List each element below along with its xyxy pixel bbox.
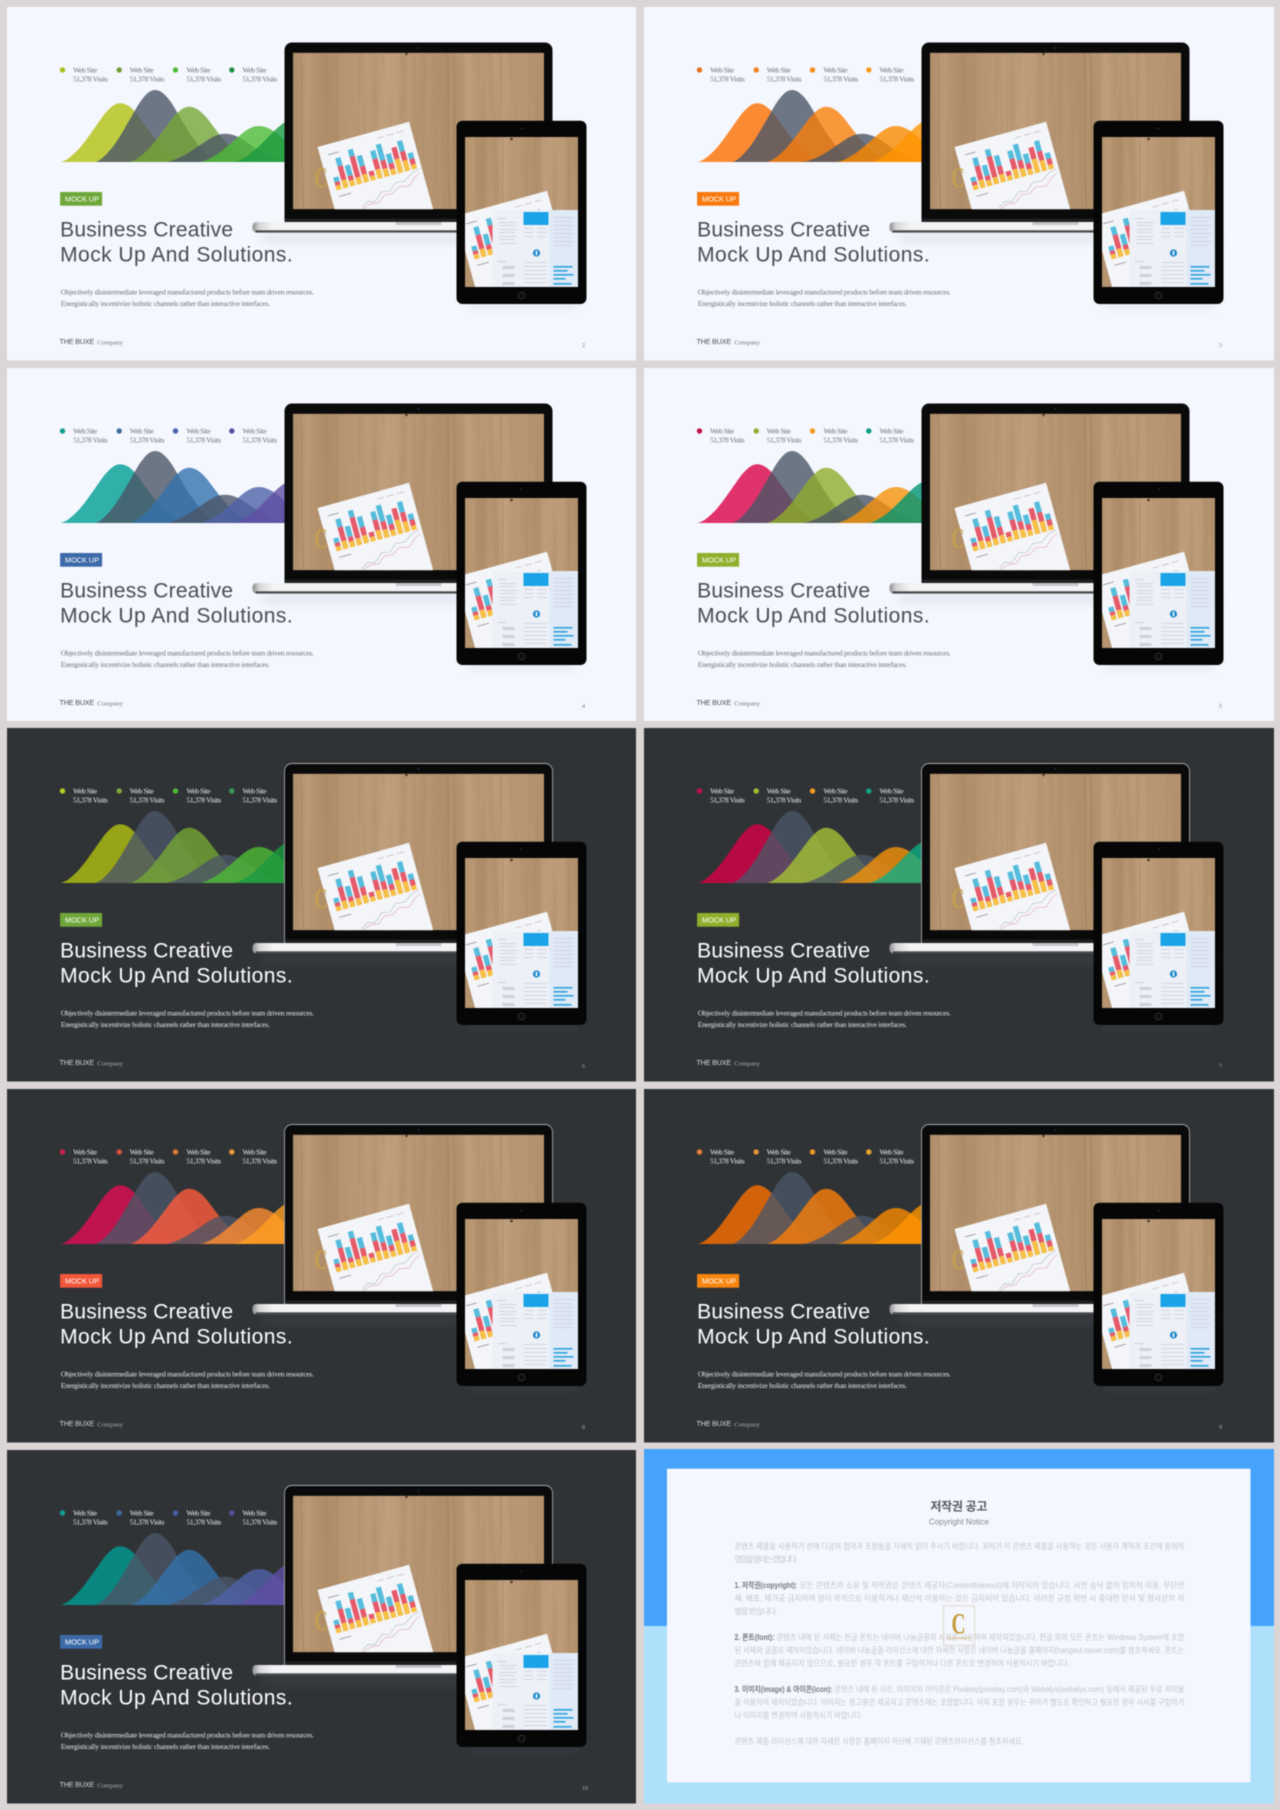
legend item 2: Web Site — [129, 1508, 154, 1517]
title: Mock Up And Solutions. — [697, 965, 929, 988]
legend item 1 — [696, 1147, 744, 1166]
footer brand: THE BUXE — [696, 1058, 731, 1067]
footer brand: Company — [97, 1782, 123, 1790]
body text: Objectively disintermediate leveraged manufactured products before team driven resources. — [60, 1009, 314, 1018]
title: Business Creative — [697, 940, 870, 963]
notice body: 콘텐츠 제품을 사용하기 전에 다음의 협약과 조항들을 자세히 읽어 주시기 바랍니다. 귀하가 이 콘텐츠 제품을 사용하는 것은 사용자 계약과 조건에 동의하 — [734, 1541, 1184, 1551]
tablet mockup — [1092, 481, 1223, 688]
legend item 2: Web Site — [129, 65, 154, 74]
notice body: 콘텐츠 내에 된 사진, 이미지와 아이콘은 Pixabay(pixabay.com)와 Webalys(webalys.com) 등에서 제공된 무료 저작물 — [834, 1684, 1184, 1694]
legend item 4 — [229, 1508, 277, 1526]
title: Mock Up And Solutions. — [697, 1326, 929, 1349]
body text: Objectively disintermediate leveraged manufactured products before team driven resources. — [697, 1009, 951, 1018]
legend item 1 — [59, 1147, 107, 1166]
badge: MOCK UP — [64, 916, 99, 925]
panel: slide 10 blue dark — [6, 1449, 637, 1804]
laptop mockup — [252, 42, 584, 258]
title: Business Creative — [60, 579, 233, 602]
legend item 3 — [172, 65, 221, 83]
legend item 4 — [866, 426, 914, 444]
body text: Energistically incentivize holistic channels rather than interactive interfaces. — [60, 659, 270, 668]
badge: MOCK UP — [64, 1638, 99, 1646]
legend item 1: Web Site — [710, 1147, 734, 1156]
body text — [60, 1009, 314, 1029]
legend item 2 — [116, 65, 164, 83]
mountain chart — [60, 90, 355, 162]
legend item 1 — [59, 426, 107, 444]
legend item 2: 51,378 Visits — [766, 74, 801, 83]
legend item 1: Web Site — [73, 1147, 97, 1156]
legend item 1: Web Site — [73, 787, 97, 796]
logo watermark: C — [314, 885, 327, 916]
legend item 3: 51,378 Visits — [823, 74, 858, 83]
page number: 5 — [1218, 704, 1222, 710]
legend item 4 — [229, 787, 277, 805]
logo watermark: C — [314, 1245, 327, 1276]
title: Business Creative — [697, 579, 870, 602]
footer brand: THE BUXE — [59, 337, 94, 346]
title: Business Creative — [60, 1301, 233, 1324]
legend — [59, 65, 277, 83]
legend item 1: Web Site — [710, 426, 734, 435]
legend item 2 — [753, 787, 801, 805]
legend item 1: 51,378 Visits — [710, 1157, 744, 1166]
legend item 1: Web Site — [73, 1508, 97, 1517]
title: Business Creative — [60, 1662, 233, 1685]
legend item 3: Web Site — [186, 1508, 211, 1517]
legend item 3: 51,378 Visits — [186, 74, 221, 83]
body text — [697, 287, 951, 308]
legend item 3 — [172, 1147, 221, 1166]
legend item 1 — [59, 787, 107, 805]
body text: Objectively disintermediate leveraged manufactured products before team driven resources. — [697, 287, 951, 296]
legend item 2: 51,378 Visits — [129, 796, 164, 805]
notice body: 콘텐츠 제품 라이선스에 대한 자세한 사항은 홈페이지 하단에 기재된 콘텐츠라이선스를 참조하세요. — [734, 1736, 1023, 1746]
body text: Objectively disintermediate leveraged manufactured products before team driven resources. — [60, 1370, 314, 1379]
notice heading: 저작권 공고 — [930, 1499, 987, 1514]
badge — [697, 1274, 739, 1288]
logo watermark: C — [951, 1245, 964, 1276]
legend item 3 — [809, 426, 858, 444]
legend item 1: 51,378 Visits — [710, 435, 744, 444]
legend item 3: Web Site — [186, 65, 211, 74]
legend item 1 — [59, 1508, 107, 1526]
legend item 2 — [116, 787, 164, 805]
logo watermark: C — [951, 885, 964, 916]
legend — [696, 1147, 914, 1166]
legend item 3: 51,378 Visits — [186, 1157, 221, 1166]
notice sheet — [667, 1469, 1250, 1783]
legend item 3: 51,378 Visits — [186, 435, 221, 444]
tablet mockup — [455, 1203, 586, 1409]
body text — [60, 1730, 314, 1751]
legend — [696, 65, 914, 83]
legend item 4: Web Site — [879, 787, 904, 796]
laptop mockup — [252, 403, 584, 619]
title — [60, 219, 292, 267]
legend item 1: 51,378 Visits — [710, 74, 744, 83]
legend item 1 — [696, 426, 744, 444]
title: Mock Up And Solutions. — [60, 965, 292, 988]
footer brand: Company — [97, 340, 123, 346]
page number: 6 — [582, 1064, 584, 1070]
legend item 2: Web Site — [129, 1147, 154, 1156]
footer brand: THE BUXE — [696, 1419, 731, 1428]
footer brand — [696, 1058, 760, 1068]
page number: 9 — [1218, 1425, 1222, 1431]
legend item 2: Web Site — [129, 787, 154, 796]
legend item 1 — [696, 65, 744, 83]
body text: Objectively disintermediate leveraged manufactured products before team driven resources. — [697, 648, 951, 657]
tablet mockup — [1092, 842, 1223, 1048]
legend item 4 — [229, 1147, 277, 1166]
tablet mockup — [1092, 121, 1223, 327]
legend item 1: Web Site — [710, 65, 734, 74]
legend item 2 — [753, 426, 801, 444]
badge: MOCK UP — [64, 1277, 99, 1286]
badge — [697, 913, 739, 927]
badge — [60, 553, 102, 566]
body text — [697, 648, 951, 668]
legend item 4: Web Site — [879, 65, 904, 74]
laptop mockup — [252, 764, 584, 979]
footer brand: Company — [734, 1061, 760, 1068]
legend item 2: Web Site — [129, 426, 154, 435]
page number: 10 — [582, 1786, 588, 1792]
tablet mockup — [455, 121, 586, 327]
badge — [697, 192, 739, 206]
notice subheading: Copyright Notice — [928, 1518, 989, 1527]
body text — [697, 1370, 951, 1390]
badge — [697, 553, 739, 566]
mountain chart — [60, 811, 355, 883]
notice body: 2. 폰트(font): — [734, 1633, 774, 1642]
legend item 2: 51,378 Visits — [766, 435, 801, 444]
mountain chart — [60, 451, 355, 523]
footer brand: THE BUXE — [59, 1058, 94, 1067]
legend item 2: Web Site — [766, 787, 791, 796]
title — [697, 219, 929, 267]
legend item 4: Web Site — [242, 1147, 267, 1156]
legend item 2: 51,378 Visits — [766, 796, 801, 805]
notice body: 1. 저작권(copyright): — [734, 1580, 797, 1590]
footer brand: THE BUXE — [696, 337, 731, 346]
badge — [60, 192, 102, 206]
footer brand: Company — [97, 1422, 123, 1429]
laptop mockup — [889, 403, 1221, 619]
notice body: 재, 배포, 재가공 금지하며 영리 목적으로 이용하거나 재산적 이용하는 것은 금지되어 있습니다. 이러한 규정 위반 시 중대한 민사 및 형사상의 처 — [734, 1593, 1184, 1603]
badge: MOCK UP — [702, 194, 736, 204]
tablet mockup — [455, 842, 586, 1048]
title — [60, 579, 292, 627]
title: Mock Up And Solutions. — [60, 244, 292, 267]
legend item 4: Web Site — [242, 65, 267, 74]
legend item 1: 51,378 Visits — [73, 435, 107, 444]
tablet mockup — [1092, 1203, 1223, 1409]
laptop mockup — [252, 1486, 584, 1701]
legend item 2: 51,378 Visits — [129, 1157, 164, 1166]
legend item 4 — [866, 787, 914, 805]
legend — [696, 426, 914, 444]
panel: slide 7 multicolor dark — [643, 727, 1275, 1082]
footer brand: THE BUXE — [59, 1780, 94, 1789]
body text: Energistically incentivize holistic channels rather than interactive interfaces. — [60, 1381, 270, 1390]
legend item 3: Web Site — [823, 426, 848, 435]
title: Mock Up And Solutions. — [60, 604, 292, 627]
legend item 2: Web Site — [766, 65, 791, 74]
legend item 3: 51,378 Visits — [823, 435, 858, 444]
panel: slide 3 orange light — [644, 6, 1274, 361]
laptop mockup — [889, 42, 1221, 258]
panel: slide 6 green dark — [6, 727, 637, 1082]
laptop mockup — [889, 764, 1221, 979]
mountain chart — [697, 90, 992, 162]
body text: Objectively disintermediate leveraged manufactured products before team driven resources. — [60, 648, 314, 657]
page number: 3 — [1218, 343, 1222, 349]
title — [697, 940, 929, 988]
title: Mock Up And Solutions. — [697, 604, 929, 627]
notice body: 콘텐츠 내에 된 서체는 한글 폰트는 네이버 나눔글꼴의 서체를 사용하여 제작되었습니다. 한글 외의 모든 폰트는 Windows System에 포함 — [776, 1632, 1184, 1642]
legend item 2: 51,378 Visits — [766, 1157, 801, 1166]
legend item 1: 51,378 Visits — [73, 74, 107, 83]
title — [60, 940, 292, 988]
footer brand: Company — [97, 1061, 123, 1068]
footer brand: THE BUXE — [696, 698, 731, 707]
mountain chart — [60, 1533, 355, 1605]
legend item 4: 51,378 Visits — [879, 1157, 914, 1166]
legend item 3: 51,378 Visits — [186, 796, 221, 805]
logo watermark box: C — [951, 1608, 965, 1641]
legend item 3 — [172, 1508, 221, 1526]
title — [60, 1662, 292, 1710]
legend item 1: 51,378 Visits — [73, 1157, 107, 1166]
legend item 3: 51,378 Visits — [186, 1517, 221, 1526]
page number: 4 — [582, 704, 584, 710]
page number: 2 — [582, 343, 584, 349]
legend item 3: Web Site — [823, 787, 848, 796]
legend item 2 — [753, 1147, 801, 1166]
logo watermark: C — [314, 163, 327, 194]
body text: Energistically incentivize holistic channels rather than interactive interfaces. — [697, 299, 907, 308]
notice body — [734, 1541, 1184, 1746]
footer brand — [59, 1419, 123, 1429]
body text: Energistically incentivize holistic channels rather than interactive interfaces. — [697, 1381, 907, 1390]
legend item 3 — [172, 426, 221, 444]
legend item 1: 51,378 Visits — [710, 796, 744, 805]
legend item 3: Web Site — [186, 787, 211, 796]
badge — [60, 913, 102, 927]
notice body: 나 이미지를 변경하여 사용하시기 바랍니다. — [734, 1710, 862, 1720]
body text: Energistically incentivize holistic channels rather than interactive interfaces. — [697, 1020, 907, 1029]
body text: Objectively disintermediate leveraged manufactured products before team driven resources. — [60, 287, 314, 296]
footer brand: THE BUXE — [59, 698, 94, 707]
title — [697, 579, 929, 627]
badge: MOCK UP — [702, 1277, 736, 1286]
footer brand: Company — [734, 700, 760, 707]
panel: slide 2 green light — [6, 6, 636, 361]
legend — [59, 426, 277, 444]
legend — [59, 1147, 277, 1166]
laptop mockup — [889, 1125, 1221, 1340]
tablet mockup — [455, 1564, 586, 1770]
title: Business Creative — [697, 1301, 870, 1324]
notice body: 벌을 받습니다. — [734, 1606, 777, 1616]
notice body: 을 이용하여 제작되었습니다. 이미지는 참고용만 제공되고 콘텐츠에는 포함합니다. 이미 포함 경우는 귀하가 별도로 확인하고 필요한 경우 사서를 구입하거 — [734, 1697, 1184, 1707]
body text — [60, 287, 314, 308]
legend item 4: Web Site — [242, 1508, 267, 1517]
legend item 3: 51,378 Visits — [823, 1157, 858, 1166]
badge — [60, 1274, 102, 1288]
footer brand — [59, 1780, 123, 1790]
footer brand: THE BUXE — [59, 1419, 94, 1428]
legend item 2: 51,378 Visits — [129, 74, 164, 83]
notice body: 모든 콘텐츠의 소유 및 저작권은 콘텐츠 제공자(Contenttokeout)에 저작되어 있습니다. 사전 승낙 없이 임의적 이용, 무단전 — [799, 1580, 1184, 1590]
body text — [60, 648, 314, 668]
body text: Energistically incentivize holistic channels rather than interactive interfaces. — [60, 299, 270, 308]
legend item 3 — [809, 65, 858, 83]
mountain chart — [697, 1172, 992, 1244]
legend item 4: 51,378 Visits — [879, 796, 914, 805]
legend — [696, 787, 914, 805]
legend item 2: Web Site — [766, 1147, 791, 1156]
legend item 3: Web Site — [823, 1147, 848, 1156]
legend item 4: Web Site — [242, 787, 267, 796]
title — [60, 1301, 292, 1349]
notice body: 3. 이미지(image) & 아이콘(icon): — [734, 1684, 832, 1694]
footer brand: Company — [734, 340, 760, 346]
legend item 2: Web Site — [766, 426, 791, 435]
legend item 3: 51,378 Visits — [823, 796, 858, 805]
legend item 2 — [753, 65, 801, 83]
legend item 3: Web Site — [186, 426, 211, 435]
notice body: 였음을 알리는 것입니다. — [734, 1554, 797, 1564]
panel: slide 9 orange dark — [643, 1088, 1275, 1444]
legend item 1: 51,378 Visits — [73, 1517, 107, 1526]
legend item 4: Web Site — [242, 426, 267, 435]
legend item 2 — [116, 426, 164, 444]
panel: slide 5 multicolor light — [644, 368, 1274, 722]
legend item 4 — [229, 426, 277, 444]
body text: Energistically incentivize holistic channels rather than interactive interfaces. — [697, 659, 907, 668]
badge: MOCK UP — [702, 916, 736, 925]
logo watermark: C — [951, 163, 964, 194]
legend item 4: 51,378 Visits — [242, 1517, 277, 1526]
body text: Energistically incentivize holistic channels rather than interactive interfaces. — [60, 1020, 270, 1029]
title: Mock Up And Solutions. — [60, 1687, 292, 1710]
legend item 3 — [172, 787, 221, 805]
legend item 4: 51,378 Visits — [879, 435, 914, 444]
title: Business Creative — [697, 219, 870, 242]
footer brand — [696, 1419, 760, 1429]
legend item 1 — [696, 787, 744, 805]
legend item 4: 51,378 Visits — [879, 74, 914, 83]
footer brand — [59, 337, 123, 346]
footer brand — [696, 337, 760, 346]
badge: MOCK UP — [702, 555, 736, 564]
badge — [60, 1635, 102, 1649]
legend item 4: Web Site — [879, 1147, 904, 1156]
badge: MOCK UP — [64, 555, 99, 564]
body text: Objectively disintermediate leveraged manufactured products before team driven resources. — [60, 1730, 314, 1739]
logo watermark: C — [314, 1606, 327, 1637]
logo watermark: C — [951, 524, 964, 555]
legend item 4 — [866, 1147, 914, 1166]
footer brand: Company — [734, 1422, 760, 1429]
page number: 7 — [1218, 1064, 1222, 1070]
legend item 3: Web Site — [186, 1147, 211, 1156]
mountain chart — [697, 811, 990, 883]
mountain chart — [697, 451, 990, 523]
legend item 4: Web Site — [879, 426, 904, 435]
legend item 1: Web Site — [710, 787, 734, 796]
legend item 4: 51,378 Visits — [242, 435, 277, 444]
legend item 4 — [866, 65, 914, 83]
legend item 2 — [116, 1508, 164, 1526]
legend item 2: 51,378 Visits — [129, 435, 164, 444]
legend — [59, 787, 277, 805]
laptop mockup — [252, 1125, 584, 1340]
legend item 4: 51,378 Visits — [242, 1157, 277, 1166]
page number: 8 — [582, 1425, 584, 1431]
title: Business Creative — [60, 940, 233, 963]
logo watermark box: COPYRIGHT — [947, 1636, 971, 1641]
footer brand — [696, 698, 760, 707]
legend item 4 — [229, 65, 277, 83]
legend item 1: 51,378 Visits — [73, 796, 107, 805]
legend item 1 — [59, 65, 107, 83]
logo watermark: C — [314, 524, 327, 555]
legend item 3 — [809, 1147, 858, 1166]
body text: Objectively disintermediate leveraged manufactured products before team driven resources. — [697, 1370, 951, 1379]
panel: copyright notice — [643, 1448, 1275, 1804]
legend — [59, 1508, 277, 1526]
notice body: 된 서체의 글꼴로 제작되었습니다. 네이버 나눔글꼴 라이선스에 대한 자세한 사항은 네이버 나눔글꼴 홈페이지(hangeul.naver.com)를 참조하세요. 폰트는 — [734, 1645, 1184, 1655]
legend item 1: Web Site — [73, 426, 97, 435]
badge: MOCK UP — [64, 194, 99, 204]
footer brand: Company — [97, 700, 123, 707]
legend item 3: Web Site — [823, 65, 848, 74]
legend item 3 — [809, 787, 858, 805]
legend item 2: 51,378 Visits — [129, 1517, 164, 1526]
logo watermark box — [943, 1606, 974, 1646]
body text — [697, 1009, 951, 1029]
legend item 4: 51,378 Visits — [242, 796, 277, 805]
footer brand — [59, 698, 123, 707]
title: Mock Up And Solutions. — [697, 244, 929, 267]
notice body: 콘텐츠와 함께 제공되지 않으므로, 필요한 경우 각 폰트를 구입하거나 다른 폰트로 변경하여 사용하시기 바랍니다. — [734, 1658, 1069, 1668]
body text — [60, 1370, 314, 1390]
legend item 2 — [116, 1147, 164, 1166]
legend item 1: Web Site — [73, 65, 97, 74]
panel: slide 8 red orange dark — [6, 1088, 637, 1444]
body text: Energistically incentivize holistic channels rather than interactive interfaces. — [60, 1742, 270, 1751]
legend item 4: 51,378 Visits — [242, 74, 277, 83]
title — [697, 1301, 929, 1349]
footer brand — [59, 1058, 123, 1068]
tablet mockup — [455, 481, 586, 688]
panel: slide 4 blue light — [6, 368, 636, 722]
mountain chart — [60, 1172, 355, 1244]
title: Mock Up And Solutions. — [60, 1326, 292, 1349]
title: Business Creative — [60, 219, 233, 242]
